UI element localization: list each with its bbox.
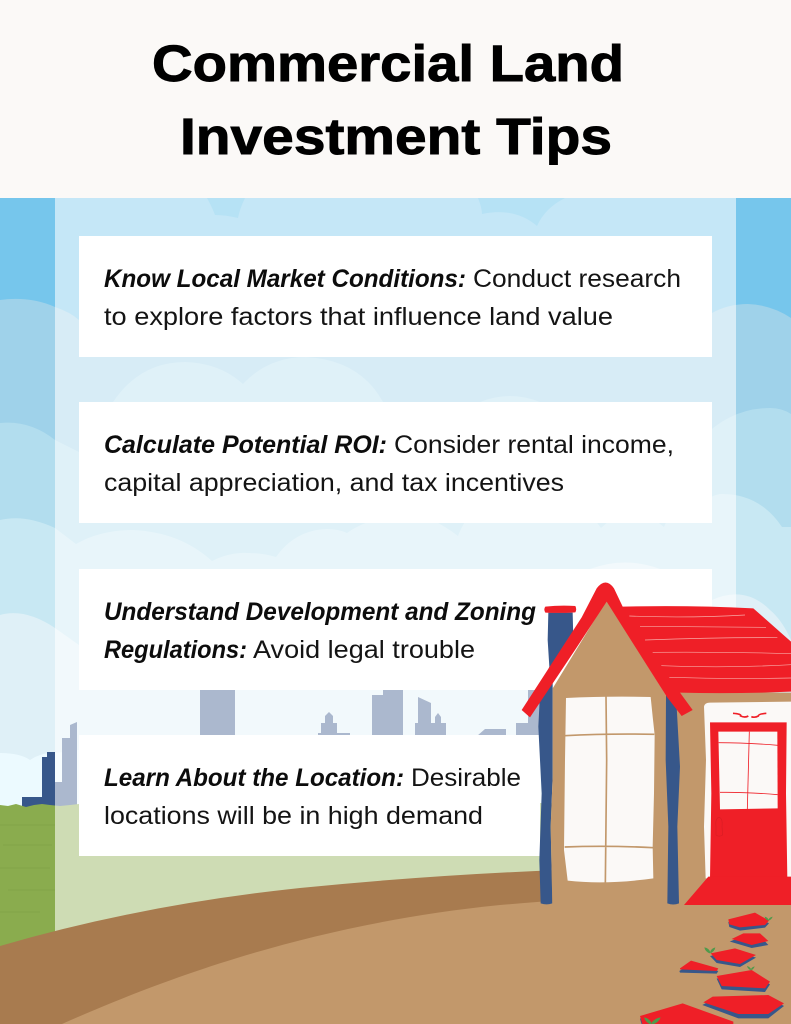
stepping stones bbox=[640, 913, 784, 1024]
card: calculate potential ROI: capital appreciation, and tax incentives bbox=[104, 469, 564, 497]
card: learn about the location: Learn About the Location: bbox=[104, 764, 404, 792]
large window bbox=[564, 696, 655, 883]
chimney cap bbox=[544, 606, 576, 613]
card: calculate potential ROI bbox=[79, 402, 712, 523]
cloud notches at top of panel bbox=[207, 198, 565, 226]
near path bbox=[62, 885, 791, 1024]
card: calculate potential ROI: Consider rental income, bbox=[394, 431, 674, 459]
card: development and zoning: Understand Development and Zoning bbox=[104, 598, 536, 626]
chimney and left post bbox=[538, 613, 573, 904]
right post bbox=[666, 695, 680, 904]
title band bbox=[0, 0, 791, 198]
stone tops bbox=[640, 913, 784, 1024]
card: development and zoning: Avoid legal trouble bbox=[253, 636, 475, 664]
card: know local market conditions: to explore factors that influence land value bbox=[104, 303, 613, 331]
card: learn about the location bbox=[79, 735, 540, 856]
far hill bbox=[0, 860, 791, 1024]
title: Commercial Land bbox=[152, 35, 624, 92]
grass field bbox=[0, 803, 791, 1000]
skyline: center buildings bbox=[200, 686, 541, 736]
roof shingle lines bbox=[629, 615, 791, 679]
card: know local market conditions: Conduct research bbox=[473, 265, 681, 293]
card: development and zoning bbox=[79, 569, 712, 690]
door frame bbox=[704, 702, 791, 878]
door ornament bbox=[733, 713, 766, 717]
title bbox=[152, 35, 624, 165]
card: know local market conditions: Know Local Market Conditions: bbox=[104, 265, 466, 293]
stone undersides bbox=[640, 915, 784, 1024]
card: calculate potential ROI: Calculate Potential ROI: bbox=[104, 431, 387, 459]
card: know local market conditions bbox=[79, 236, 712, 357]
leaves bbox=[644, 917, 773, 1024]
card: learn about the location: Desirable bbox=[411, 764, 521, 792]
skyline: left towers bbox=[22, 722, 77, 808]
card: learn about the location: locations will be in high demand bbox=[104, 802, 483, 830]
red door bbox=[710, 722, 787, 878]
pale panel overlay bbox=[55, 198, 736, 1024]
house body bbox=[551, 600, 791, 905]
card: development and zoning: Regulations: bbox=[104, 636, 247, 664]
roof bbox=[522, 582, 791, 717]
title: Investment Tips bbox=[180, 108, 612, 165]
doorstep bbox=[684, 877, 791, 905]
house illustration bbox=[522, 582, 791, 905]
